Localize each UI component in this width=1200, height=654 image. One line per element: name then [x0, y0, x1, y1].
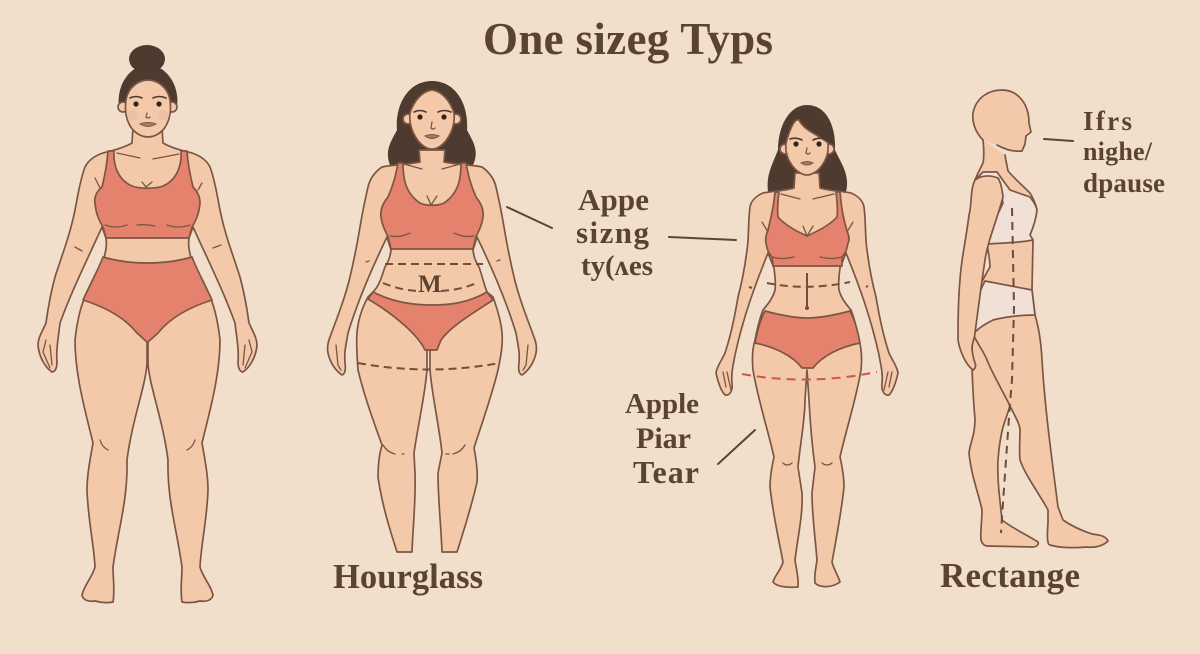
callout: Appe sizng types: ty(ʌes: [581, 250, 653, 282]
briefs: [368, 292, 493, 350]
figure: woman with swept hair, front view: [716, 105, 898, 587]
bra: [381, 163, 483, 249]
callout: line to figure two: [507, 207, 552, 228]
callout: Ifrs nighe dpause: [1083, 106, 1165, 198]
callout: Apple Piar Tear: Tear: [633, 454, 699, 490]
white bra: [975, 172, 1037, 244]
figure: woman with hair bun, front view: [38, 45, 257, 603]
body creases: [336, 164, 528, 454]
callout: Ifrs nighe dpause: nighe/: [1083, 137, 1153, 166]
briefs: [755, 311, 860, 368]
callout: Ifrs nighe dpause: dpause: [1083, 168, 1165, 198]
callout: Appe sizng types: [576, 182, 653, 282]
body creases: [723, 194, 892, 465]
callout: Apple Piar Tear: Apple: [625, 388, 699, 420]
briefs: [83, 257, 212, 342]
figure: hourglass body: [328, 81, 536, 552]
callout: Appe sizng types: Appe: [578, 182, 649, 217]
head and face: [780, 120, 834, 175]
measurement lines: [742, 273, 877, 380]
body outline: [716, 173, 898, 587]
label: Hourglass: Hourglass: [333, 558, 483, 596]
measurement lines: [358, 264, 500, 370]
body creases: [43, 153, 252, 450]
head and face: [403, 90, 461, 149]
arm: [958, 176, 1003, 370]
callout: line to figure three: [669, 237, 736, 240]
body outline: [328, 150, 536, 552]
icon: long straight hair: [768, 105, 847, 192]
head and face: [118, 80, 177, 137]
bra: [95, 151, 200, 238]
callout: Apple Piar Tear: [625, 388, 699, 490]
figure: side view: [958, 90, 1108, 548]
torso and front leg: [972, 140, 1108, 548]
callout: Appe sizng types: sizng: [576, 215, 650, 250]
icon: hair bun: [119, 45, 177, 107]
callout: line to side figure: [1044, 139, 1073, 141]
body outline: [38, 128, 257, 603]
measurement line: [1001, 208, 1014, 533]
label: Rectange: Rectange: [940, 556, 1080, 595]
callout: Apple Piar Tear: Piar: [636, 422, 691, 455]
white briefs: [972, 281, 1035, 332]
callout: Ifrs nighe dpause: Ifrs: [1083, 106, 1132, 136]
label: M: M: [418, 271, 442, 298]
back leg: [969, 328, 1038, 547]
icon: long hair: [388, 81, 476, 165]
title: One sizeg Typs: [483, 14, 773, 64]
callout: line to figure three legs: [718, 430, 755, 464]
bra: [766, 192, 849, 266]
head profile: [973, 90, 1031, 151]
